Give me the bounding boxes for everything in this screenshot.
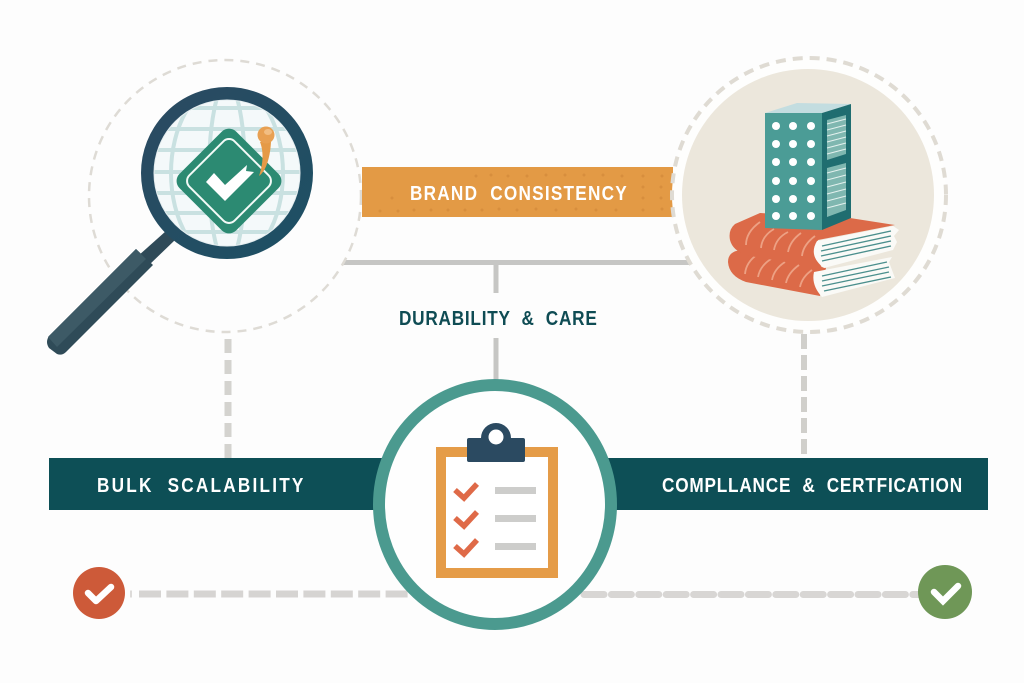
clipboard board (441, 452, 553, 573)
panel: central checklist circle (379, 385, 611, 624)
label: bulk scalability: BULK SCALABILITY (97, 474, 304, 496)
label: compliance and certification: COMPLLANCE & CERTFICATION (662, 474, 962, 496)
label: durability and care: DURABILITY & CARE (399, 307, 597, 329)
icon: red check (73, 567, 125, 619)
magnifier handle neck (138, 231, 175, 266)
label: brand consistency: BRAND CONSISTENCY (410, 182, 627, 204)
lower book (728, 250, 895, 297)
magnifier lens grid (154, 100, 300, 246)
panel: magnifier dashed circle (89, 60, 361, 332)
clipboard clip (467, 423, 525, 462)
banner: brand consistency (362, 167, 673, 217)
upper book (730, 213, 899, 268)
banner: bulk scalability (49, 458, 389, 510)
icon: building (765, 103, 851, 230)
magnifier handle grip (47, 249, 153, 355)
icon: green check (918, 565, 972, 619)
magnifier ring (148, 94, 306, 252)
connector: right dashed vertical (801, 334, 807, 458)
checklist rows (455, 484, 477, 554)
icon: green check badge (172, 124, 286, 238)
connector: top grey line (343, 260, 690, 382)
icon: stacked books (728, 213, 899, 297)
dashed timeline: right (584, 591, 925, 598)
banner: compliance and certification (600, 458, 988, 510)
connector: left dashed vertical (224, 339, 232, 458)
panel: beige disc (682, 69, 934, 321)
icon: magnifying glass (47, 83, 306, 355)
dashed timeline: left (130, 590, 410, 598)
panel: building and books dashed circle (672, 58, 946, 332)
icon: clipboard checklist (441, 423, 553, 573)
icon: orange pin (258, 126, 274, 176)
